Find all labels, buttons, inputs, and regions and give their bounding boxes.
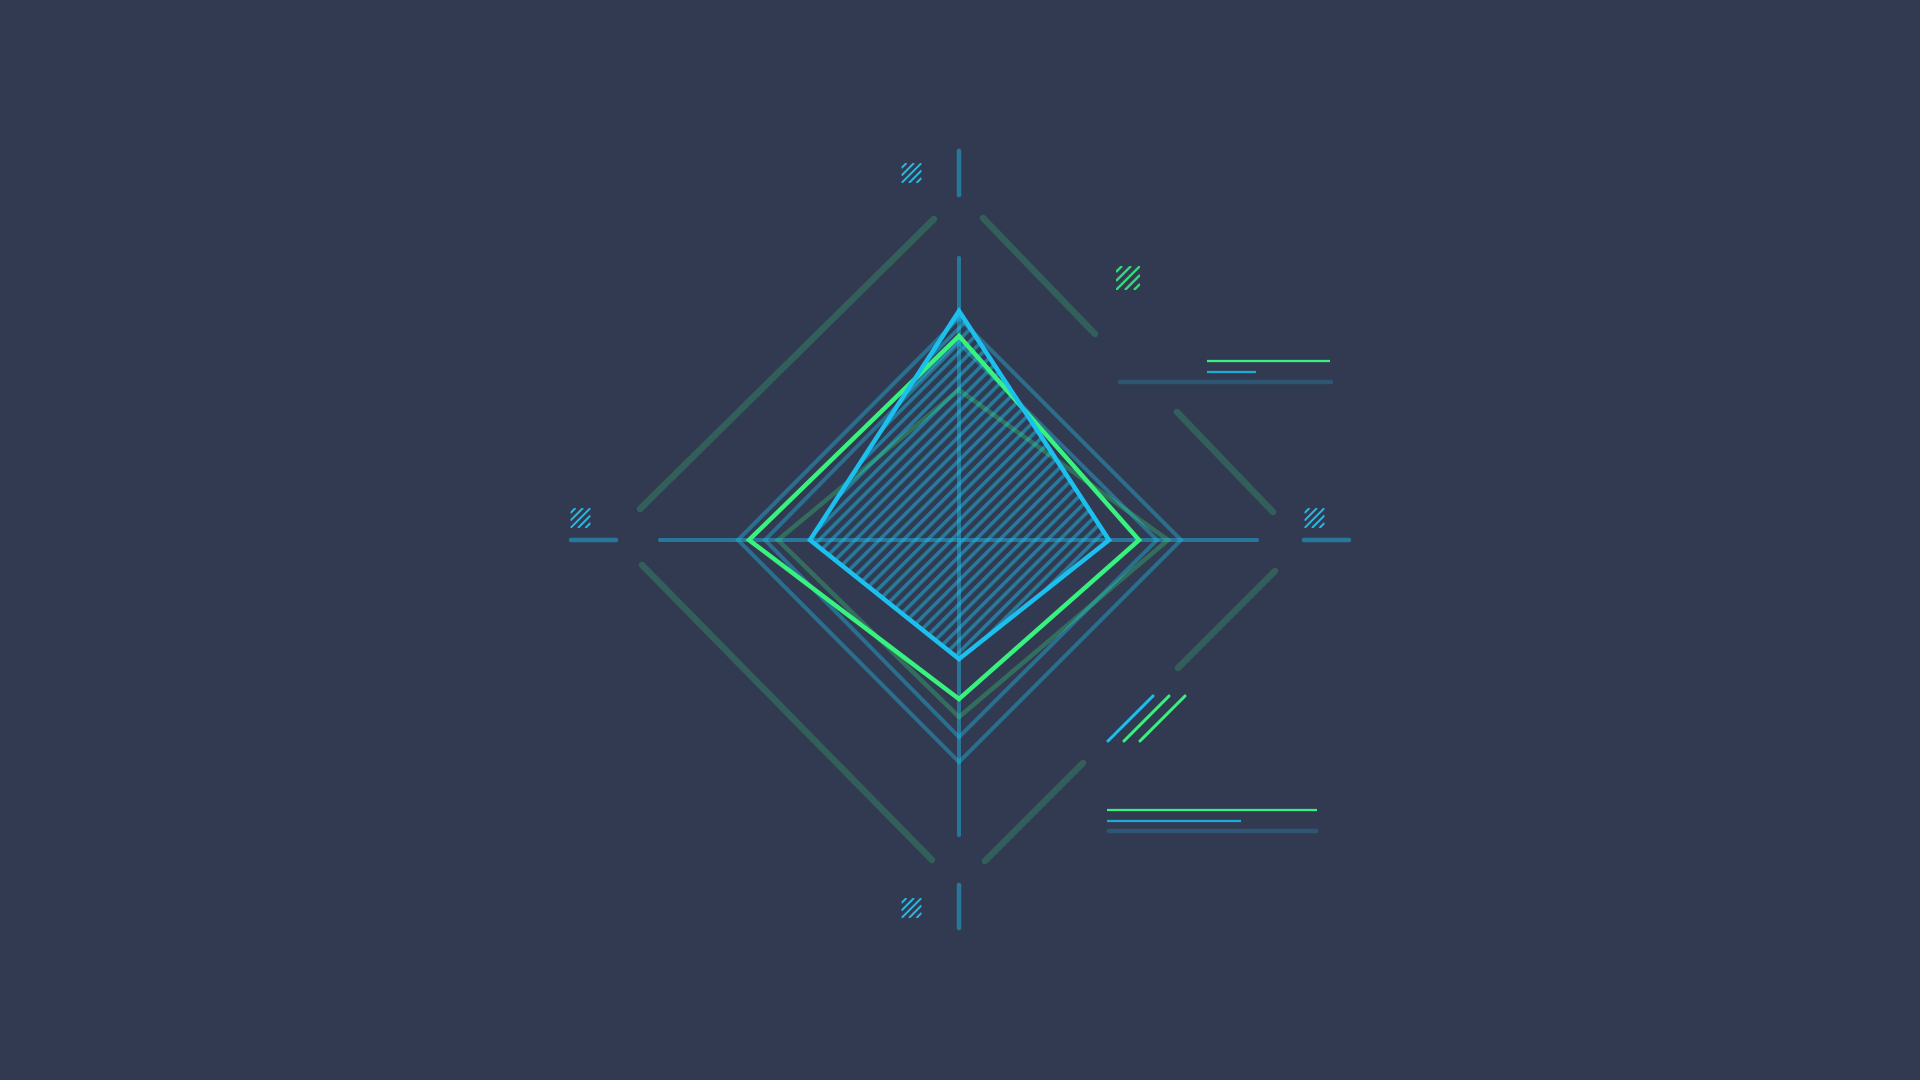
hatched fill of blue series <box>816 316 1106 656</box>
cyan series polygon <box>810 311 1109 659</box>
dim green series polygon <box>778 390 1168 717</box>
radar grid: outer diamond <box>738 318 1181 762</box>
icon: hatched square left <box>570 508 590 528</box>
three slashes icon <box>1108 696 1185 741</box>
radar infographic <box>568 148 1352 930</box>
icon: hatched square bottom <box>902 898 922 918</box>
icon: hatched square right <box>1304 508 1324 528</box>
icon: hatched square top <box>902 163 922 183</box>
radar grid: inner diamond <box>765 343 1157 737</box>
outer frame segments <box>640 218 1275 861</box>
legend lines top right <box>1120 361 1331 382</box>
bright green series polygon <box>749 336 1139 699</box>
legend lines bottom right <box>1107 810 1317 831</box>
icon: green hatched square <box>1116 266 1140 290</box>
axes <box>571 151 1349 928</box>
